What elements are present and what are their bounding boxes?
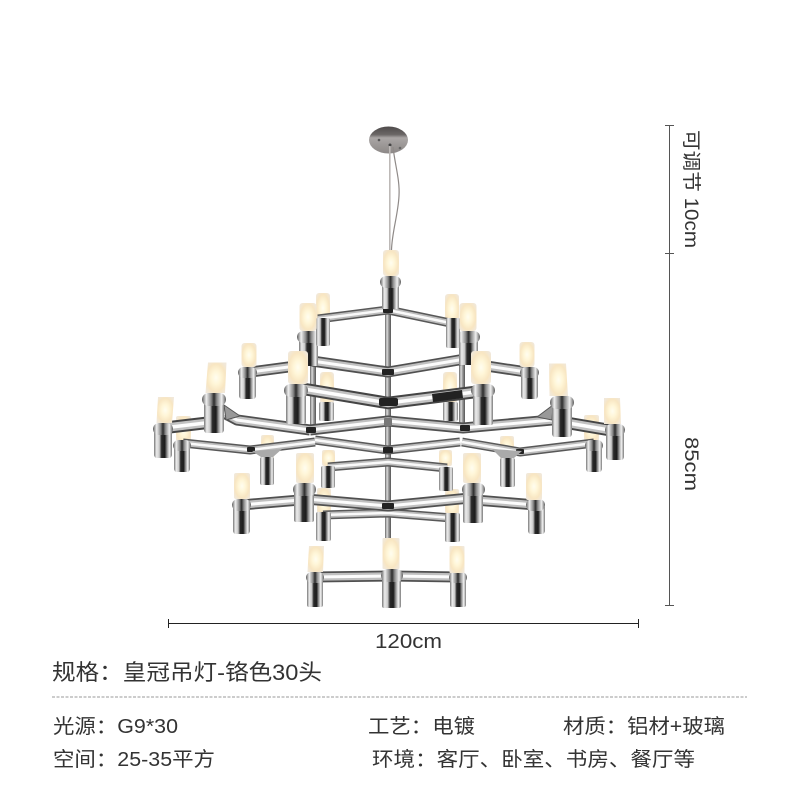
holders: lower tier	[232, 466, 545, 542]
holders: second tier	[238, 367, 539, 425]
arm brackets	[224, 405, 553, 420]
label: 120cm: 120cm	[375, 631, 442, 653]
spec heading: 规格：皇冠吊灯-铬色30头	[52, 660, 322, 685]
holders: top tier	[297, 276, 480, 366]
dimension: width 120cm	[168, 619, 638, 653]
chrome lamp holders	[153, 276, 625, 608]
spec: environment: 环境：客厅、卧室、书房、餐厅等	[372, 748, 695, 771]
holders: widest tier	[153, 393, 625, 487]
label: 85cm: 85cm	[680, 437, 701, 491]
chandelier product illustration	[153, 126, 625, 608]
label: adjustable 10cm: 可调节 10cm	[680, 130, 702, 248]
spec: craft: 工艺：电镀	[368, 715, 475, 738]
dark connector bands	[247, 307, 524, 509]
suspension wires	[390, 146, 399, 250]
chrome arms	[163, 307, 615, 577]
dashed divider	[52, 696, 747, 698]
holders: bottom tier	[306, 569, 467, 608]
spec: space: 空间：25-35平方	[53, 748, 215, 771]
spec: light source: 光源：G9*30	[53, 715, 178, 738]
back lamps	[176, 293, 599, 517]
central and side poles	[310, 305, 465, 538]
dimension: adjustable height	[665, 125, 702, 254]
spec: material: 材质：铝材+玻璃	[563, 715, 725, 738]
front lamps	[156, 250, 621, 573]
ceiling plate	[369, 126, 408, 154]
dimension: height 85cm	[665, 253, 701, 606]
